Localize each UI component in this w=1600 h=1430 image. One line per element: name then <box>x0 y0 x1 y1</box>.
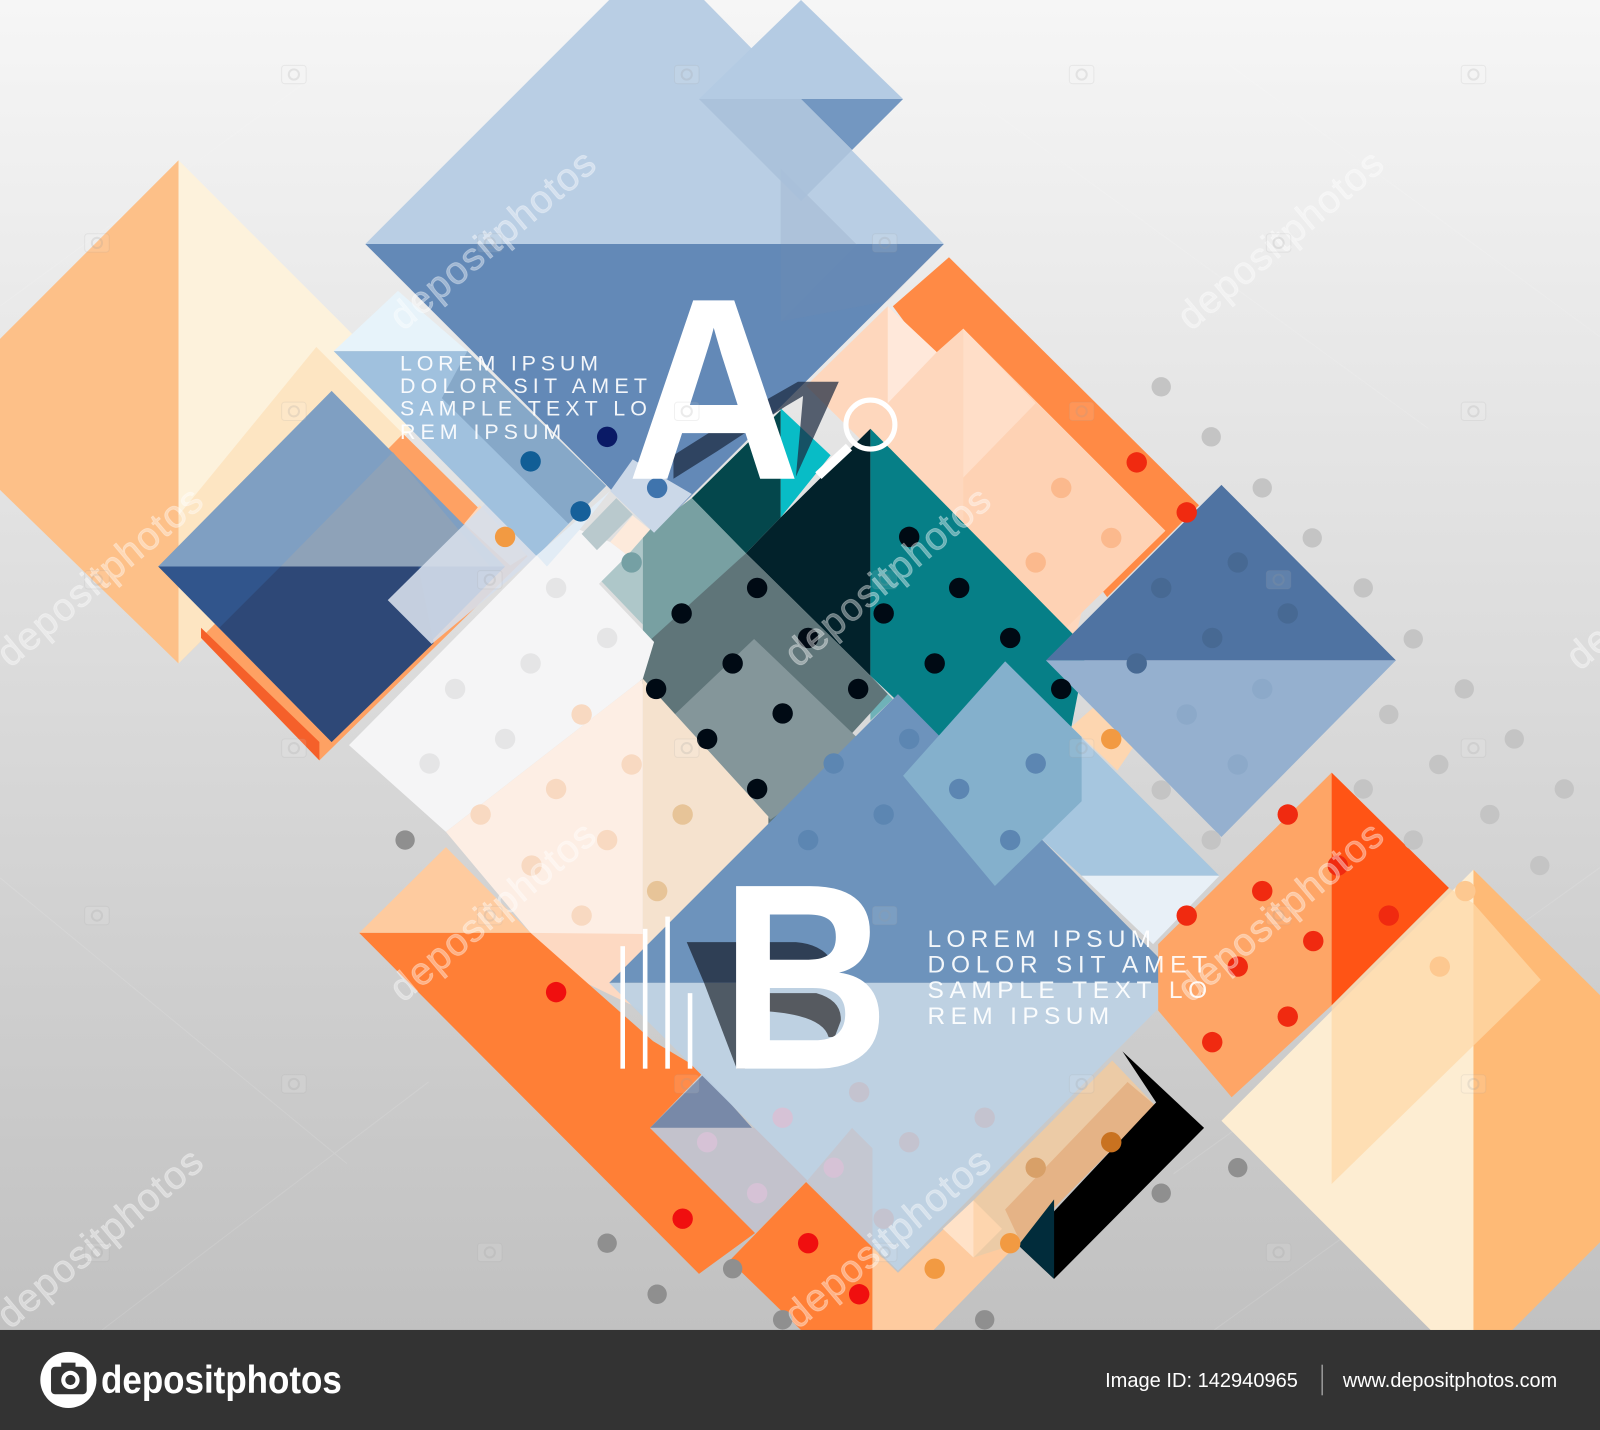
watermarks: depositphotos <box>1169 142 1392 339</box>
panel: B blue diamond <box>609 694 1184 1271</box>
panel: centre light strips <box>537 459 692 566</box>
text block: A caption: REM IPSUM <box>400 420 561 444</box>
panel: left orange underlay <box>201 434 528 760</box>
panel: bottom peach band <box>872 1061 1155 1330</box>
panel: right orange diamond <box>1158 773 1449 1097</box>
panel: light blue square <box>903 661 1219 944</box>
footer website: www.depositphotos.com <box>1342 1370 1557 1392</box>
panel: white translucent diamond <box>349 530 654 832</box>
panel: grey-teal translucent diamonds <box>599 498 888 825</box>
panel: grey triangles <box>650 1074 852 1233</box>
icon: magnifier <box>818 400 895 476</box>
watermarks: depositphotos <box>776 478 999 675</box>
panel: teal diamond <box>692 408 1087 740</box>
panel: small light blue diamond <box>388 494 549 644</box>
text block: A caption: DOLOR SIT AMET <box>400 374 647 398</box>
text block: A caption: LOREM IPSUM <box>400 352 598 376</box>
panel: right cream and orange diamond <box>1221 870 1600 1330</box>
panel: black chevron <box>1018 1051 1204 1279</box>
dots pattern <box>395 377 1574 1329</box>
panel: pale blue strip <box>334 291 606 556</box>
footer logo <box>40 1352 342 1408</box>
panel: left orange and cream diamond <box>0 160 430 663</box>
text block: A caption <box>400 352 647 444</box>
panel: pale peach diamond <box>446 679 768 1010</box>
panel: small top blue diamond <box>699 0 903 201</box>
watermarks: depositphotos <box>381 142 604 339</box>
text block: B caption: DOLOR SIT AMET <box>928 952 1207 979</box>
watermarks: depositphotos <box>381 813 604 1010</box>
text block: B caption <box>928 926 1207 1030</box>
footer image id: Image ID: 142940965 <box>1105 1370 1298 1392</box>
watermarks: depositphotos <box>1169 813 1392 1010</box>
text block: B caption: SAMPLE TEXT LO <box>928 977 1207 1004</box>
icon: vertical bars <box>620 917 692 1069</box>
panel: bottom left orange band <box>359 847 872 1330</box>
panel: left blue diamond <box>158 391 505 742</box>
letter A shadow <box>673 382 839 479</box>
text block: B caption: REM IPSUM <box>928 1003 1109 1030</box>
text block: B caption: LOREM IPSUM <box>928 926 1151 953</box>
watermarks: depositphotos <box>776 1140 999 1337</box>
heading letter B: B <box>720 830 890 1126</box>
heading letter A: A <box>627 244 801 534</box>
panel: right orange and peach shape <box>806 257 1199 771</box>
watermark camera marks <box>85 65 1486 1262</box>
letter B shadow <box>687 942 841 1069</box>
footer bar <box>0 1330 1600 1430</box>
footer logo: depositphotos <box>101 1359 342 1402</box>
text block: A caption: SAMPLE TEXT LO <box>400 396 647 420</box>
panel: right blue diamond <box>1046 485 1396 837</box>
panel: top large blue shape <box>365 0 944 533</box>
